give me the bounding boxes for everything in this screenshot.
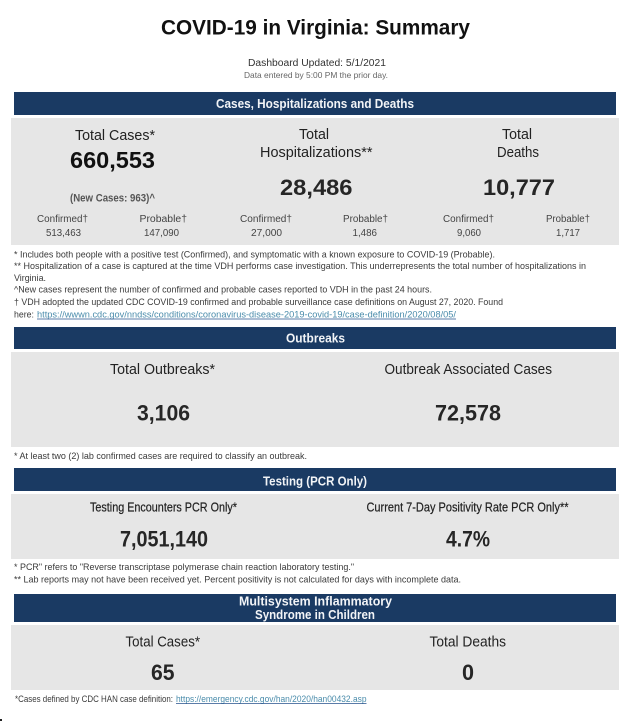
footnote: MIS-C case definition — [15, 694, 366, 705]
hospitalizations probable: 1,486 — [352, 228, 377, 239]
section header: outbreaks — [14, 327, 616, 349]
testing encounters metric: Testing Encounters PCR Only* — [90, 501, 237, 515]
footnote: MIS-C case definition: *Cases defined by CDC HAN case definition: — [15, 694, 173, 705]
total cases metric — [70, 128, 155, 204]
footnotes: cases section: here: — [14, 310, 34, 320]
footnote: outbreaks: * At least two (2) lab confirmed cases are required to classify an outbreak. — [14, 451, 307, 462]
positivity rate metric: 4.7% — [446, 527, 490, 552]
footnotes: cases section — [14, 250, 586, 320]
outbreak associated cases metric: 72,578 — [435, 401, 501, 426]
footnotes: testing: ** Lab reports may not have been received yet. Percent positivity is not calculated for days with incomplete data. — [14, 575, 461, 586]
deaths probable: Probable† — [546, 214, 590, 225]
section header: cases, hospitalizations and deaths — [14, 92, 616, 115]
total cases metric: 660,553 — [70, 147, 155, 173]
MIS-C total cases metric — [126, 635, 200, 685]
total cases confirmed — [37, 214, 88, 239]
footnotes: testing: * PCR" refers to "Reverse transcriptase polymerase chain reaction laboratory testing." — [14, 562, 354, 573]
total cases metric: Total Cases* — [75, 128, 155, 144]
deaths probable: 1,717 — [556, 228, 580, 239]
panel: multisystem inflammatory syndrome in children — [11, 625, 619, 690]
total cases confirmed: Confirmed† — [37, 214, 88, 225]
section header: multisystem inflammatory syndrome in children: Syndrome in Children — [255, 608, 375, 622]
deaths confirmed: Confirmed† — [443, 214, 494, 225]
positivity rate metric — [366, 501, 569, 552]
testing encounters metric — [90, 501, 237, 552]
total outbreaks metric: 3,106 — [137, 401, 190, 426]
total hospitalizations metric: Hospitalizations** — [260, 145, 373, 161]
section header: multisystem inflammatory syndrome in children — [14, 594, 616, 622]
total cases confirmed: 513,463 — [46, 228, 81, 239]
hospitalizations probable — [343, 214, 388, 239]
footnotes: cases section: https://wwwn.cdc.gov/nndss/conditions/coronavirus-disease-2019-covid-19/case-definition/2020/08/05/ — [37, 310, 456, 320]
footnotes: cases section: † VDH adopted the updated CDC COVID-19 confirmed and probable surveillance case definitions on August 27, 2020. Found — [14, 297, 503, 308]
outbreak associated cases metric — [384, 362, 552, 426]
total outbreaks metric: Total Outbreaks* — [110, 362, 215, 378]
total outbreaks metric — [110, 362, 215, 426]
footnotes: testing — [14, 562, 461, 586]
total hospitalizations metric: 28,486 — [280, 175, 352, 200]
deaths probable — [546, 214, 590, 239]
total deaths metric: Deaths — [497, 145, 539, 161]
MIS-C total deaths metric — [430, 635, 506, 685]
MIS-C total cases metric: Total Cases* — [126, 635, 200, 651]
MIS-C total cases metric: 65 — [151, 660, 174, 685]
total cases metric: (New Cases: 963)^ — [70, 192, 155, 204]
MIS-C total deaths metric: Total Deaths — [430, 635, 506, 651]
section header: cases, hospitalizations and deaths: Cases, Hospitalizations and Deaths — [216, 97, 414, 111]
dashboard updated date: Dashboard Updated: 5/1/2021 — [248, 58, 386, 69]
MIS-C total deaths metric: 0 — [462, 660, 474, 685]
panel: cases, hospitalizations and deaths — [11, 118, 619, 245]
panel: outbreaks — [11, 352, 619, 447]
total hospitalizations metric — [260, 127, 373, 200]
hospitalizations confirmed — [240, 214, 292, 239]
hospitalizations confirmed: 27,000 — [251, 228, 282, 239]
testing encounters metric: 7,051,140 — [120, 527, 208, 552]
footnotes: cases section: Virginia. — [14, 273, 46, 284]
outbreak associated cases metric: Outbreak Associated Cases — [384, 362, 552, 378]
section header: testing — [14, 468, 616, 491]
deaths confirmed — [443, 214, 494, 239]
title: COVID-19 in Virginia: Summary — [161, 16, 470, 40]
footnote: MIS-C case definition: https://emergency.cdc.gov/han/2020/han00432.asp — [176, 694, 366, 705]
total deaths metric: Total — [502, 127, 532, 143]
deaths confirmed: 9,060 — [457, 228, 481, 239]
footnotes: cases section: ^New cases represent the number of confirmed and probable cases reported to VDH in the past 24 hours. — [14, 285, 432, 296]
section header: outbreaks: Outbreaks — [286, 332, 345, 346]
footnotes: cases section: ** Hospitalization of a case is captured at the time VDH performs case investigation. This underrepresents the total number of hospitalizations in — [14, 261, 586, 272]
footnotes: cases section: * Includes both people with a positive test (Confirmed), and symptomatic with a known exposure to COVID-19 (Probable). — [14, 250, 495, 260]
total deaths metric: 10,777 — [483, 175, 555, 200]
positivity rate metric: Current 7-Day Positivity Rate PCR Only** — [366, 501, 569, 515]
panel: testing — [11, 494, 619, 559]
total hospitalizations metric: Total — [299, 127, 329, 143]
total cases probable: Probable† — [140, 214, 187, 225]
total cases probable: 147,090 — [144, 228, 179, 239]
total deaths metric — [483, 127, 555, 200]
hospitalizations probable: Probable† — [343, 214, 388, 225]
data entry note: Data entered by 5:00 PM the prior day. — [244, 70, 388, 80]
section header: multisystem inflammatory syndrome in children: Multisystem Inflammatory — [239, 595, 392, 609]
section header: testing: Testing (PCR Only) — [263, 474, 367, 488]
total cases probable — [140, 214, 187, 239]
hospitalizations confirmed: Confirmed† — [240, 214, 292, 225]
